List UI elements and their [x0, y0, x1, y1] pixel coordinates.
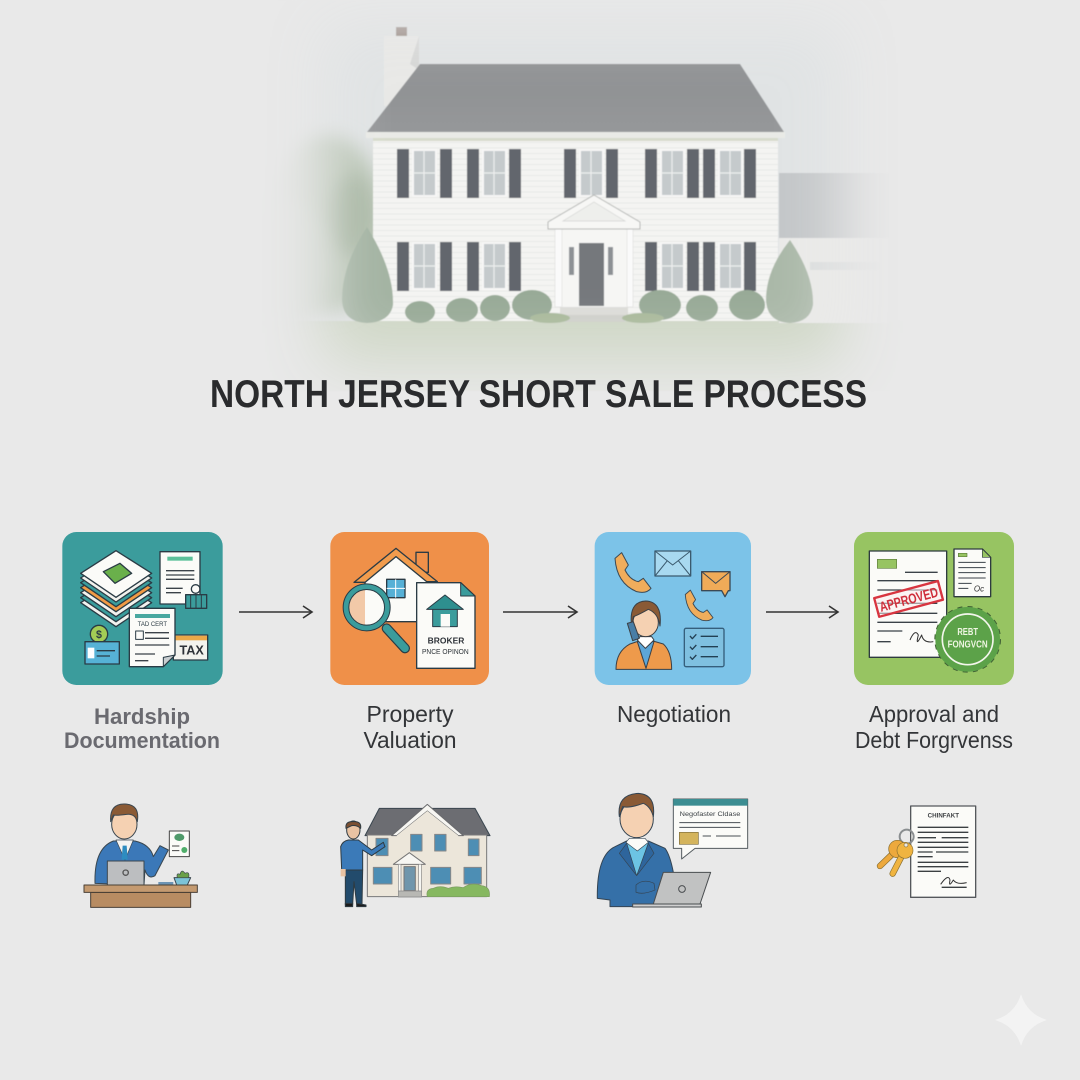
label: negotiation: Negotiation — [617, 701, 731, 727]
small document — [954, 549, 991, 597]
desk — [84, 885, 197, 907]
form: TAD CERT — [138, 622, 167, 628]
laptop — [633, 872, 711, 907]
label: hardship documentation: Hardship — [94, 704, 190, 729]
label: approval and debt forgiveness: Approval and — [869, 701, 999, 727]
stack of papers and money — [81, 551, 152, 627]
phone small — [685, 590, 713, 621]
broker price opinion document: BROKER — [428, 635, 465, 645]
label: property valuation: Property — [366, 701, 454, 727]
form — [129, 608, 175, 667]
plant and tablet — [158, 871, 191, 885]
teal tile — [62, 532, 223, 685]
tax sheet: TAX — [179, 644, 204, 658]
suit — [95, 841, 168, 885]
checklist — [684, 628, 724, 667]
agent — [341, 821, 385, 907]
illustration: agent at desk — [84, 804, 197, 907]
small document: Oc — [974, 585, 984, 594]
laptop — [107, 861, 144, 885]
trees left — [300, 132, 374, 318]
speech bubble — [673, 799, 748, 859]
coin — [90, 625, 108, 643]
garage right — [778, 172, 858, 324]
arrow 2 — [503, 606, 577, 618]
label: hardship documentation: Documentation — [64, 728, 220, 753]
tax sheet — [173, 635, 208, 660]
green tile — [854, 532, 1014, 685]
sparkle watermark — [995, 994, 1047, 1046]
arrow 3 — [766, 606, 838, 618]
suit — [597, 841, 673, 907]
chimney — [384, 27, 419, 106]
label: approval and debt forgiveness: Debt Forgrvenss — [855, 727, 1013, 753]
approved stamp: APPROVED — [878, 584, 940, 615]
id card — [85, 642, 119, 664]
blue tile — [595, 532, 751, 685]
arrow 1 — [239, 606, 312, 618]
debt forgiven seal: REBT — [957, 627, 978, 638]
broker price opinion document — [417, 583, 475, 668]
paper — [169, 831, 189, 857]
arborvitae right — [766, 240, 813, 323]
house wall — [373, 138, 778, 321]
illustration: agent and house — [341, 804, 490, 907]
keys — [880, 830, 914, 874]
hand — [636, 881, 655, 893]
head — [111, 804, 138, 839]
shirt and tie — [116, 840, 133, 860]
title: NORTH JERSEY SHORT SALE PROCESS — [210, 373, 867, 416]
phone large — [615, 553, 651, 592]
document with clip — [160, 552, 207, 608]
step 4: approval and debt forgiveness — [854, 532, 1014, 685]
coin: $ — [96, 629, 102, 641]
label: hardship documentation — [64, 704, 220, 753]
orange tile — [330, 532, 489, 685]
illustration: contract and keys — [880, 806, 976, 897]
shrubs — [405, 290, 765, 323]
hero photo: white colonial house — [296, 26, 864, 382]
head — [619, 793, 654, 838]
label: property valuation: Valuation — [364, 727, 456, 753]
magnifying glass — [344, 587, 405, 648]
upper and lower windows — [397, 149, 756, 291]
portico and front door — [548, 195, 640, 322]
step 3: negotiation — [595, 532, 751, 685]
label: property valuation — [364, 701, 456, 753]
agent on phone — [616, 601, 672, 669]
illustration: negotiating agent with laptop — [597, 793, 748, 907]
house — [365, 804, 490, 897]
speech bubble: Negofaster Cldase — [680, 811, 741, 818]
step 1: hardship documentation — [62, 532, 223, 685]
debt forgiven seal — [938, 609, 998, 669]
envelope light — [655, 551, 691, 576]
label: approval and debt forgiveness — [855, 701, 1013, 753]
arborvitae left — [342, 227, 393, 323]
envelope orange — [702, 572, 730, 597]
contract: CHINFAKT — [928, 813, 959, 820]
debt forgiven seal: FONGVCN — [948, 639, 988, 650]
step labels — [64, 701, 1013, 753]
roof — [366, 64, 785, 141]
house outline — [354, 548, 437, 622]
step 2: property valuation — [330, 532, 489, 685]
broker price opinion document: PNCE OPINON — [422, 647, 469, 656]
shirt and tie — [619, 838, 654, 876]
approved letter — [869, 551, 947, 657]
